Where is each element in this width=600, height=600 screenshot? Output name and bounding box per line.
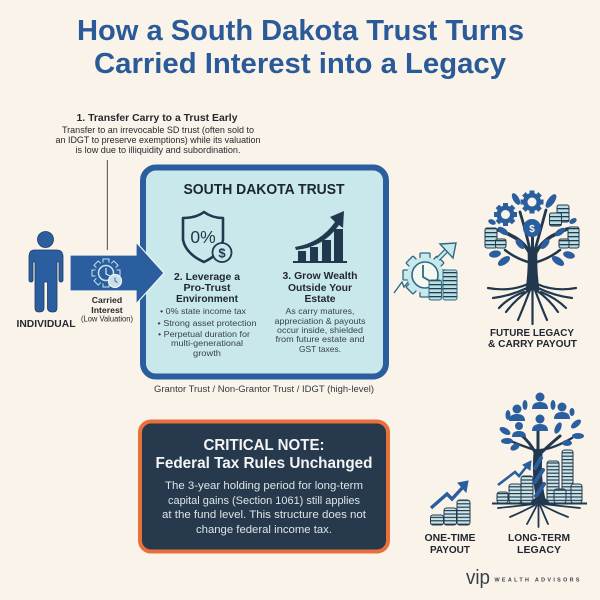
legacy tree leaves <box>498 400 584 452</box>
callout body: at the fund level. This structure does not <box>162 509 367 521</box>
carried interest label: (Low Valuation) <box>81 314 133 324</box>
icon: long-term legacy tree <box>492 392 587 527</box>
callout body <box>162 480 367 536</box>
legacy tree people <box>509 392 570 437</box>
step 3 heading: grow wealth outside your estate: 3. Grow Wealth <box>282 270 358 282</box>
connector line from step 1 to arrow <box>106 160 108 250</box>
tree roots <box>488 284 576 324</box>
individual label: INDIVIDUAL <box>16 319 76 330</box>
step 3 description: from future estate and <box>276 334 365 344</box>
icon: individual person <box>29 232 63 312</box>
step 3 description <box>274 306 366 354</box>
callout body: The 3-year holding period for long-term <box>165 480 363 492</box>
step 1 text: transfer carry to a trust early <box>56 112 260 155</box>
step 1 text: transfer carry to a trust early: an IDGT to preserve exemptions) while its valuation <box>56 135 260 145</box>
long-term legacy label: LEGACY <box>517 545 561 556</box>
one-time payout label <box>424 533 476 556</box>
step 2 bullet list: • Strong asset protection <box>158 318 257 328</box>
tree coin stacks <box>485 205 579 248</box>
icon: shield with 0 percent and dollar coin: $ <box>218 246 226 260</box>
step 3 description: occur inside, shielded <box>277 325 363 335</box>
step 2 heading: leverage a pro-trust environment: 2. Leverage a <box>174 271 240 283</box>
logo: vip wealth advisors <box>466 567 580 589</box>
logo: vip wealth advisors: vip <box>466 567 490 589</box>
carried interest label: Interest <box>91 305 123 315</box>
panel heading: SOUTH DAKOTA TRUST <box>184 182 345 198</box>
legacy tree arrow <box>498 466 527 485</box>
step 2 bullet list: multi-generational <box>171 338 243 348</box>
step 1 text: transfer carry to a trust early: is low due to illiquidity and subordination. <box>76 145 241 155</box>
icon: future legacy tree <box>485 190 579 324</box>
callout heading <box>156 437 372 472</box>
step 3 description: appreciation & payouts <box>274 316 366 326</box>
icon: rising bar chart with arrow <box>293 211 347 263</box>
carried interest label: Carried <box>92 295 122 305</box>
step 3 heading: grow wealth outside your estate <box>282 270 358 305</box>
icon: one-time payout coins and arrow <box>430 481 470 525</box>
logo: vip wealth advisors: WEALTH ADVISORS <box>494 578 580 584</box>
one-time payout label: PAYOUT <box>430 545 470 556</box>
step 2 heading: leverage a pro-trust environment <box>174 271 240 305</box>
step 2 bullet list: growth <box>193 348 221 358</box>
step 2 bullet list: • 0% state income tax <box>160 306 247 316</box>
title <box>77 15 524 80</box>
legacy tree ground and roots <box>492 502 587 504</box>
title: Carried Interest into a Legacy <box>94 48 506 80</box>
callout: critical note <box>140 422 388 552</box>
step 2 heading: leverage a pro-trust environment: Environment <box>176 293 238 305</box>
step 3 heading: grow wealth outside your estate: Outside Your <box>288 282 352 294</box>
title: How a South Dakota Trust Turns <box>77 15 524 47</box>
future legacy label: & CARRY PAYOUT <box>488 339 578 350</box>
trust types caption: Grantor Trust / Non-Grantor Trust / IDGT (high-level) <box>154 384 374 395</box>
tree leaves <box>487 192 578 268</box>
step 2 bullet list <box>158 306 257 358</box>
long-term legacy label: LONG-TERM <box>508 533 570 544</box>
tree dollar gear <box>523 219 541 237</box>
step 1 text: transfer carry to a trust early: Transfer to an irrevocable SD trust (often sold to <box>62 125 254 135</box>
panel: south dakota trust <box>143 168 386 376</box>
callout body: capital gains (Section 1061) still applies <box>168 495 360 507</box>
step 2 bullet list: • Perpetual duration for <box>158 329 250 339</box>
callout body: change federal income tax. <box>196 524 332 536</box>
legacy tree trunk and branches <box>508 428 572 500</box>
callout heading: Federal Tax Rules Unchanged <box>156 455 372 472</box>
icon: gear with clock, growth arrow and coins <box>394 243 457 300</box>
future legacy label: FUTURE LEGACY <box>490 328 574 339</box>
step 3 heading: grow wealth outside your estate: Estate <box>304 293 336 305</box>
icon: future legacy tree: $ <box>529 224 535 235</box>
long-term legacy label <box>508 533 570 556</box>
icon: shield with 0 percent and dollar coin <box>183 212 232 262</box>
carried interest label <box>81 295 133 324</box>
arrow: carried interest into trust <box>70 242 164 304</box>
step 2 heading: leverage a pro-trust environment: Pro-Trust <box>184 282 231 294</box>
icon: shield with 0 percent and dollar coin: 0% <box>190 227 216 247</box>
step 3 description: As carry matures, <box>286 306 354 316</box>
callout heading: CRITICAL NOTE: <box>204 437 324 454</box>
icon: gear with clock on arrow <box>92 259 122 288</box>
step 1 text: transfer carry to a trust early: 1. Transfer Carry to a Trust Early <box>76 112 238 124</box>
future legacy label <box>488 328 578 350</box>
step 3 description: GST taxes. <box>299 344 341 354</box>
one-time payout label: ONE-TIME <box>424 533 476 544</box>
legacy tree coin stacks <box>497 450 582 503</box>
tree trunk and branches <box>498 210 567 290</box>
tree gears <box>494 190 544 226</box>
